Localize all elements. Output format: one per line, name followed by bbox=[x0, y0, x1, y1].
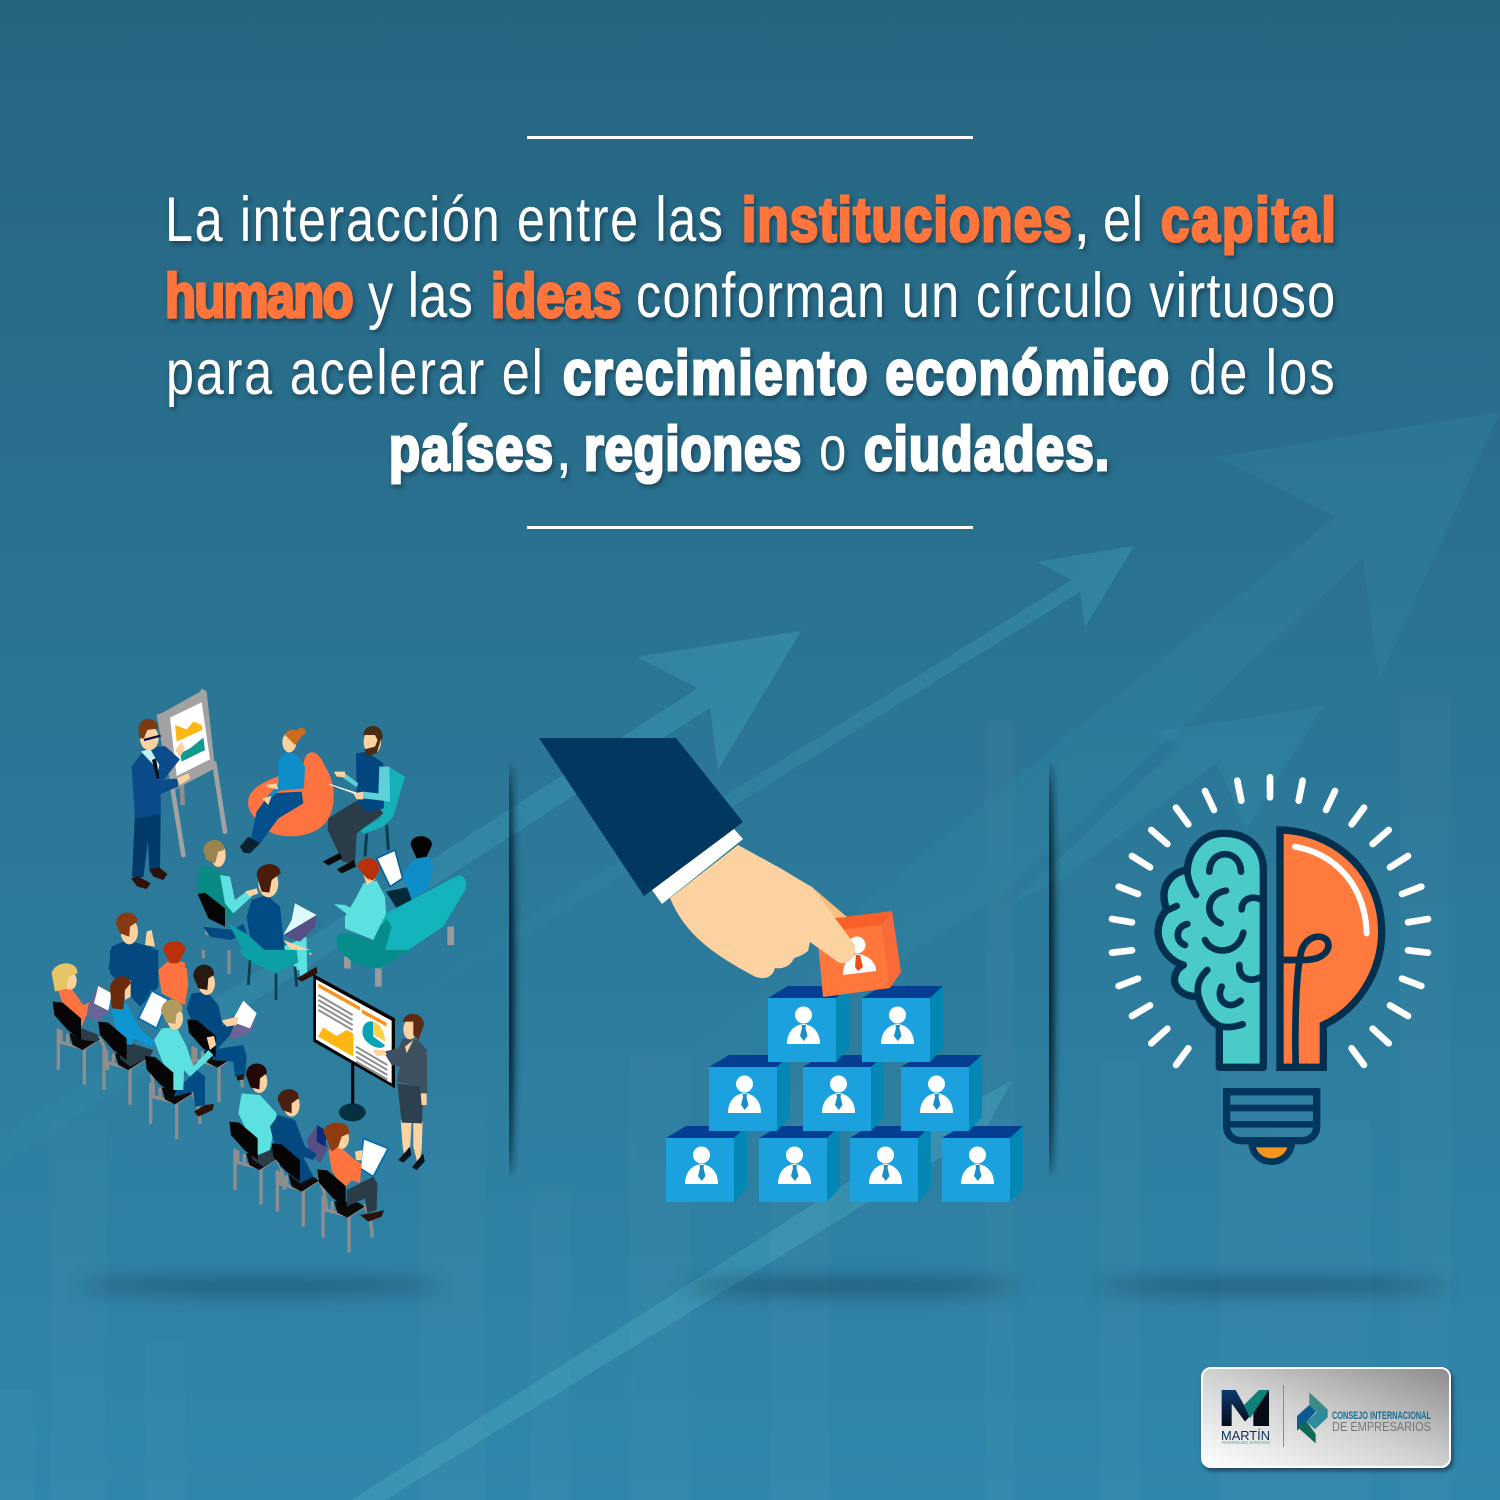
logo: Consejo name: DE EMPRESARIOS bbox=[1332, 1420, 1431, 1434]
ground shadows bbox=[78, 1276, 1448, 1296]
headline line 1: instituciones bbox=[742, 186, 1072, 255]
thumb bbox=[812, 887, 847, 918]
logo: Martín monogram bbox=[1221, 1390, 1270, 1445]
headline line 4 bbox=[389, 413, 1109, 484]
divider shadow left bbox=[504, 765, 514, 1175]
navy attendee with laptop bbox=[187, 965, 257, 1101]
headline line 1: La interacción entre las bbox=[165, 185, 723, 255]
brain left half bbox=[1158, 833, 1263, 1067]
presenter woman bbox=[373, 1014, 427, 1170]
headline line 1: el bbox=[1103, 185, 1143, 255]
pyramid bottom row bbox=[666, 1126, 1023, 1202]
logo plate bbox=[1202, 1368, 1450, 1467]
headline line 1: capital bbox=[1161, 186, 1336, 255]
headline line 4: ciudades. bbox=[864, 415, 1109, 484]
top rule bbox=[527, 136, 973, 139]
pyramid middle row bbox=[709, 1055, 982, 1131]
background: rising arrows bbox=[0, 412, 1500, 1500]
illustration: people in training (upper) bbox=[108, 688, 466, 970]
headline line 2: y las bbox=[368, 261, 473, 331]
headline line 3: de los bbox=[1189, 338, 1335, 408]
hand bbox=[670, 845, 855, 978]
teal attendee clapping bbox=[145, 1000, 216, 1138]
audience member with clapping hands bbox=[108, 912, 157, 970]
logo: Consejo emblem bbox=[1297, 1392, 1328, 1443]
headline line 2: ideas bbox=[491, 262, 621, 331]
orange cube bbox=[817, 911, 901, 997]
illustration: people in training (lower) bbox=[52, 950, 427, 1251]
sofa couple bbox=[334, 836, 466, 969]
headline line 4: países bbox=[389, 415, 553, 484]
logo: Consejo name bbox=[1332, 1410, 1431, 1434]
headline line 1 bbox=[165, 185, 1336, 255]
pyramid top row bbox=[768, 986, 943, 1062]
bottom rule bbox=[527, 526, 973, 529]
front row attendees bbox=[229, 1064, 388, 1251]
headline line 4: regiones bbox=[584, 415, 801, 484]
headline line 2: humano bbox=[165, 262, 354, 331]
bulb right half bbox=[1280, 830, 1382, 1067]
logo divider bbox=[1283, 1385, 1284, 1447]
background: faint rising bars bbox=[0, 694, 1450, 1500]
headline line 2 bbox=[165, 261, 1335, 331]
seated man with vest bbox=[197, 840, 258, 940]
teal chair man with laptop bbox=[228, 864, 317, 970]
logo: Martín monogram: MARTÍN bbox=[1221, 1428, 1270, 1443]
bearded man on chair bbox=[323, 726, 405, 873]
headline line 3 bbox=[166, 338, 1335, 408]
logo: Martín monogram: RODRÍGUEZ SÁNCHEZ bbox=[1222, 1439, 1270, 1445]
headline line 3: para acelerar el bbox=[166, 338, 543, 408]
audience member orange top bbox=[163, 941, 185, 970]
suit sleeve bbox=[539, 738, 743, 896]
headline line 4: , bbox=[555, 414, 573, 484]
headline line 2: conforman un círculo virtuoso bbox=[636, 261, 1335, 331]
illustration: hand placing cube on pyramid bbox=[539, 738, 1023, 1202]
illustration: brain and light bulb bbox=[1112, 777, 1428, 1162]
logo: Consejo name: CONSEJO INTERNACIONAL bbox=[1332, 1410, 1431, 1422]
headline line 4: o bbox=[819, 413, 846, 483]
bulb screw base bbox=[1227, 1092, 1317, 1162]
presenter man bbox=[131, 719, 190, 889]
headline text bbox=[165, 185, 1336, 484]
lower part of upper seating: chair legs and sofa base bbox=[203, 950, 412, 1000]
shirt cuff bbox=[652, 829, 743, 904]
easel with chart bbox=[157, 688, 225, 855]
light rays bbox=[1112, 777, 1428, 1065]
headline line 1: , bbox=[1073, 185, 1091, 255]
presentation board on stand bbox=[313, 974, 395, 1121]
beanbag woman bbox=[240, 728, 334, 853]
headline line 3: crecimiento económico bbox=[563, 339, 1169, 408]
divider shadow right bbox=[1044, 765, 1054, 1175]
second row audience bbox=[52, 950, 188, 1103]
